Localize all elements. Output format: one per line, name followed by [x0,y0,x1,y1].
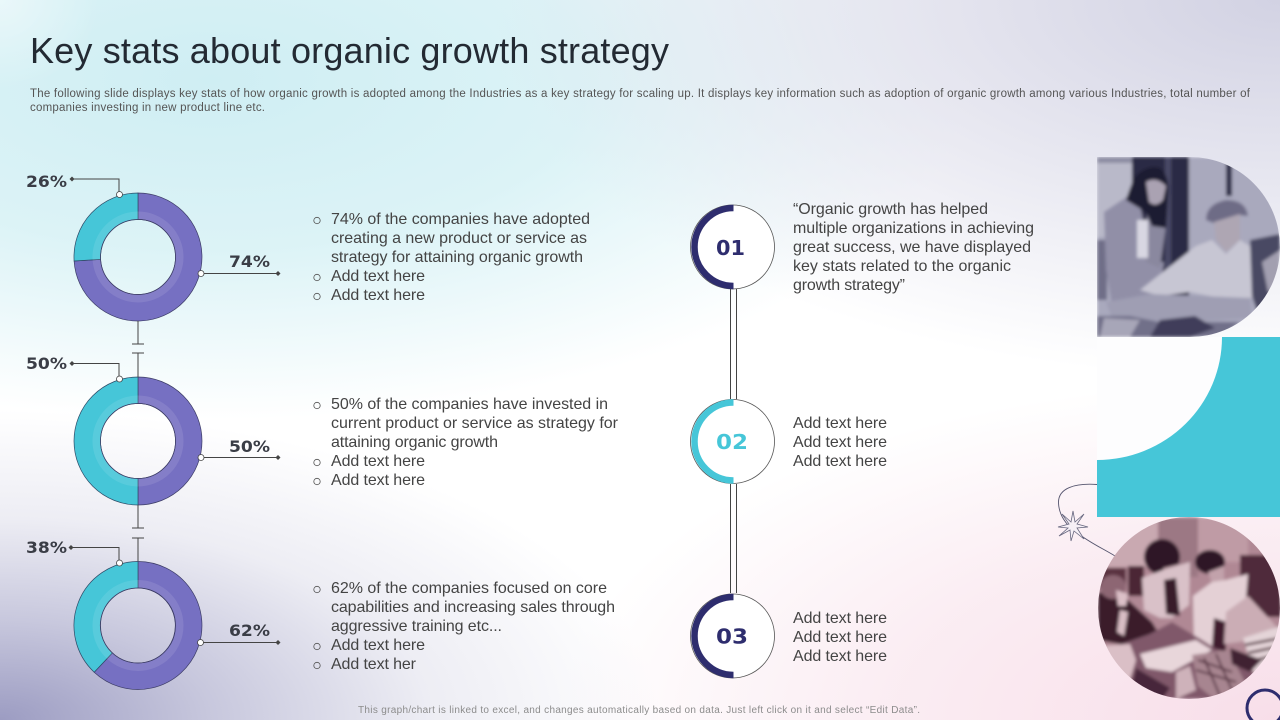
timeline node 01: 01 [716,236,745,260]
text block: node 02 [793,415,887,470]
timeline connectors [730,289,736,593]
donut chart 2: 50% / 50% [26,354,280,505]
quote text: growth strategy” [793,277,905,294]
label: 26%: 26% [26,172,67,191]
timeline node 02: 02 [716,430,748,454]
text block: 74% stat: Add text here [331,268,425,285]
title: Key stats about organic growth strategy [30,30,669,71]
label: 74%: 74% [229,252,270,271]
text block: 62% stat [314,580,615,673]
text block: 74% stat [314,211,590,304]
decorative ring [1247,690,1280,720]
text block: node 03: Add text here [793,629,887,646]
label: 62%: 62% [229,621,270,640]
quote text: key stats related to the organic [793,258,1011,275]
donut connectors [132,321,144,561]
donut chart 3: 62% / 38% [26,538,280,689]
label: right 50% [198,437,280,460]
text block: 50% stat: current product or service as strategy for [331,415,619,432]
text block: node 03 [793,610,887,665]
text block: 50% stat: attaining organic growth [331,434,498,451]
timeline node 03 [690,594,774,678]
footer note: This graph/chart is linked to excel, and changes automatically based on data. Just left click on it and select “Edit Data”. [358,705,920,716]
text block: 74% stat: strategy for attaining organic growth [331,249,583,266]
subtitle text: The following slide displays key stats of how organic growth is adopted among the Industries as a key strategy for scaling up. It displays key information such as adoption of organic growth among various Industries, total number of [30,88,1251,100]
label: left 50% [26,354,122,382]
subtitle text [30,88,1251,114]
label: 62% [198,621,280,646]
photo: team around table [1098,517,1280,699]
text block: node 02: Add text here [793,453,887,470]
donut chart 1: 74% / 26% [26,172,280,321]
timeline node 01 [690,205,774,289]
text block: 50% stat: 50% of the companies have invested in [331,396,608,413]
timeline node 03: 03 [716,624,748,648]
text block: 62% stat: Add text her [331,656,417,673]
text block: 74% stat: Add text here [331,287,425,304]
text block: 50% stat: Add text here [331,453,425,470]
label: 38%: 38% [26,538,67,557]
text block: 74% stat: 74% of the companies have adopted [331,211,590,228]
text block: node 03: Add text here [793,648,887,665]
text block: node 02: Add text here [793,415,887,432]
label: 26% [26,172,122,198]
text block: 74% stat: creating a new product or service as [331,230,587,247]
text block: node 03: Add text here [793,610,887,627]
text block: 62% stat: 62% of the companies focused on core [331,580,607,597]
text block: 50% stat: Add text here [331,472,425,489]
icon: sparkle star with curved line [1058,484,1115,556]
label: right 50%: 50% [229,437,270,456]
timeline node 02 [690,400,774,484]
label: left 50%: 50% [26,354,67,373]
label: 74% [198,252,280,276]
quote text: great success, we have displayed [793,239,1031,256]
photo: colleagues at desk [1097,157,1280,337]
subtitle text: companies investing in new product line etc. [30,102,265,114]
text block: node 02: Add text here [793,434,887,451]
text block: 62% stat: aggressive training etc... [331,618,502,635]
text block: 62% stat: Add text here [331,637,425,654]
quote text [793,201,1034,294]
quote text: “Organic growth has helped [793,201,988,218]
quote text: multiple organizations in achieving [793,220,1034,237]
label: 38% [26,538,122,566]
text block: 62% stat: capabilities and increasing sales through [331,599,615,616]
decorative cyan panel with quarter circle [1097,337,1280,517]
text block: 50% stat [314,396,619,489]
